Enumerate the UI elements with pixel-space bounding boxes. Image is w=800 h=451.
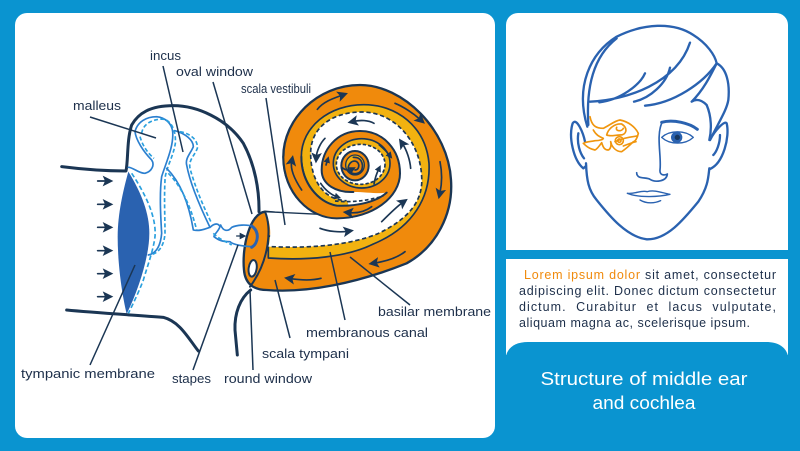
jaw: [586, 163, 709, 239]
cochlea: [244, 85, 451, 291]
face: [571, 26, 729, 239]
diagram labels: malleus: [73, 99, 121, 113]
hair and head outline: [583, 26, 729, 140]
malleus: [128, 117, 173, 255]
ear canal wall upper: [62, 106, 259, 212]
diagram labels: basilar membrane: [378, 305, 491, 319]
diagram labels: scala tympani: [262, 347, 349, 361]
central orange turn: [341, 151, 369, 180]
pupil: [675, 135, 680, 140]
sound arrows: [98, 181, 107, 297]
incus dashed: [168, 132, 232, 245]
inner turn fill: [283, 131, 400, 218]
title: [540, 369, 748, 413]
iris: [671, 132, 682, 143]
duct roof line: [265, 212, 320, 214]
central spiral: [348, 157, 362, 174]
panel: ear diagram: [15, 13, 495, 438]
description text: adipiscing elit. Donec dictum consectetur: [519, 284, 776, 298]
central yellow ring: [346, 155, 364, 175]
lower dashes of the second turn: [335, 196, 383, 202]
title: Structure of middle ear: [540, 369, 748, 389]
hair strands: [590, 43, 717, 106]
duct dashed edge: [272, 112, 422, 247]
ear canal wall lower: [67, 310, 198, 351]
hair inner edge: [588, 38, 617, 125]
diagram labels: oval window: [176, 65, 254, 79]
diagram labels: membranous canal: [306, 326, 428, 340]
opening rim: [250, 212, 269, 287]
inner turn outline: [283, 131, 400, 218]
leader lines: [90, 66, 410, 370]
stapes arrow: [237, 234, 242, 238]
incus: [167, 131, 257, 247]
description text: [519, 268, 776, 330]
malleus dashed: [140, 119, 175, 255]
second white ring: [336, 144, 385, 184]
description text: dictum. Curabitur et lacus vulputate,: [519, 300, 776, 314]
eyebrow: [662, 121, 697, 129]
membrane dashed: [128, 173, 155, 313]
stapes plate: [252, 226, 257, 247]
tube: [235, 290, 251, 355]
panel: description: [506, 259, 788, 355]
yellow strip: [268, 105, 429, 259]
diagram labels: stapes: [172, 372, 211, 386]
right ear: [710, 123, 728, 169]
diagram labels: round window: [224, 372, 313, 386]
fringe: [692, 63, 717, 140]
mouth: [627, 191, 670, 203]
orange ear overlay: [583, 117, 638, 152]
nose: [637, 123, 667, 181]
white duct: [265, 112, 422, 247]
panel: title tab: [506, 342, 788, 358]
diagram labels: scala vestibuli: [241, 82, 311, 96]
panel: face: [506, 13, 788, 250]
description text: aliquam magna ac, scelerisque ipsum.: [519, 316, 750, 330]
diagram labels: incus: [150, 49, 181, 63]
description text: Lorem ipsum dolor sit amet, consectetur: [524, 268, 776, 282]
eye: [662, 132, 693, 143]
title: and cochlea: [592, 393, 697, 413]
cochlea outer shell: [244, 85, 451, 291]
left ear: [571, 122, 586, 168]
diagram labels: [21, 49, 491, 386]
middle ear: [62, 106, 259, 355]
round window: [248, 260, 258, 277]
second yellow ring: [333, 139, 390, 188]
flow arrows: [291, 95, 442, 280]
tympanic membrane: [118, 172, 149, 314]
diagram labels: tympanic membrane: [21, 367, 155, 381]
